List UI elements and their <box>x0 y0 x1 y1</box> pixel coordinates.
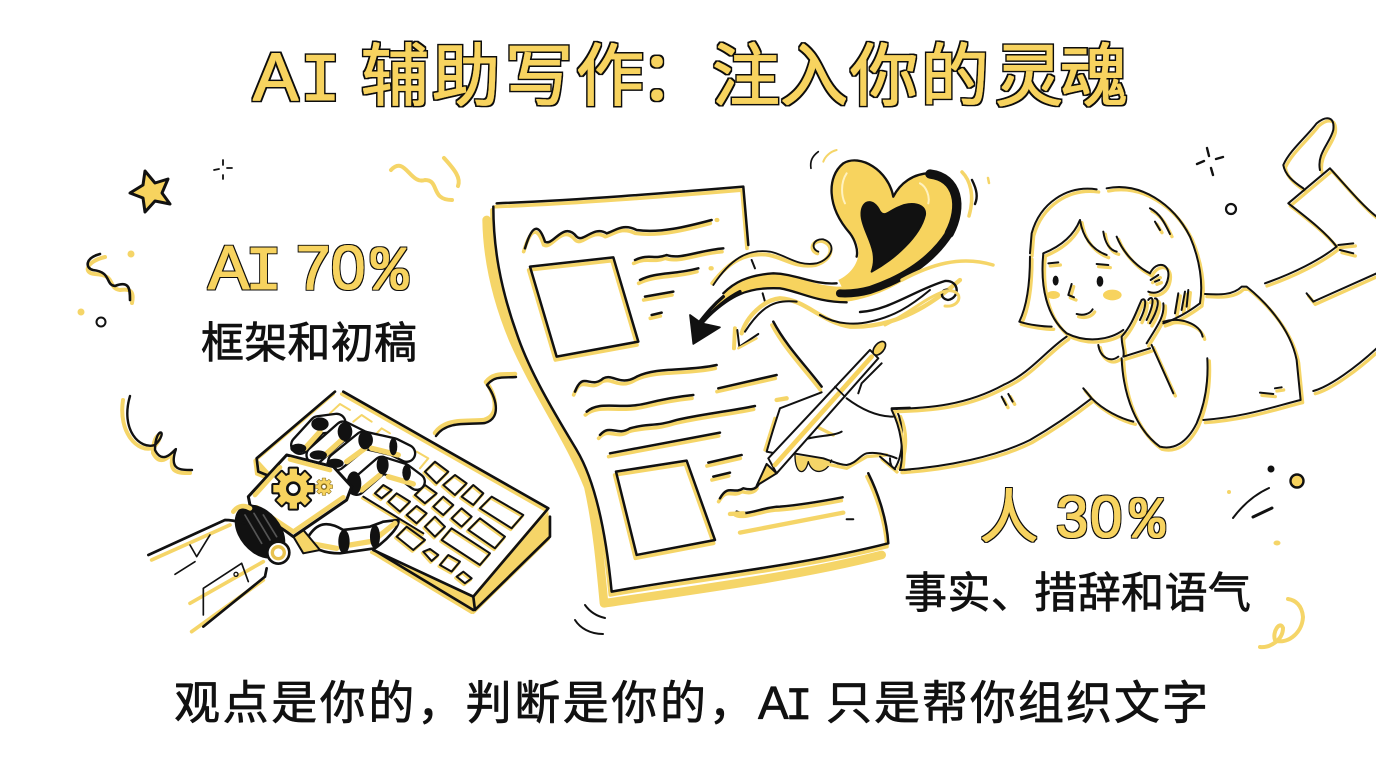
document page <box>487 187 888 603</box>
bottom tagline: 观点是你的，判断是你的， <box>174 677 757 729</box>
bottom tagline: I <box>785 681 840 733</box>
title: ： <box>640 39 708 115</box>
heart right accents <box>860 172 993 325</box>
stat caption: 框架和初稿 <box>201 320 417 368</box>
icon: writing hand with pen <box>757 339 910 486</box>
robot wrist joint <box>224 495 296 568</box>
robot thumb <box>308 520 398 554</box>
stat caption: 事实、措辞和语气 <box>904 570 1251 618</box>
robot arm sleeve <box>148 520 267 632</box>
icon: robot hand <box>148 417 417 632</box>
icon: solid arrowhead <box>690 315 720 344</box>
icon: heart <box>700 150 959 323</box>
icon: large gear <box>273 469 313 509</box>
title: 辅助写作 <box>361 39 644 115</box>
title: A <box>253 39 299 115</box>
bottom tagline: A <box>758 677 789 729</box>
heart and flowing ribbons <box>690 150 960 348</box>
icon: girl lying down <box>880 118 1376 473</box>
hand <box>765 392 910 472</box>
robot fingers <box>290 417 417 495</box>
stat value: 人 30%: 30 <box>1056 485 1122 550</box>
cheeks <box>1047 290 1122 300</box>
stat value: AI 70%: I <box>245 237 319 308</box>
right stat: 人 30% <box>904 485 1251 618</box>
left stat: AI 70% <box>201 234 417 368</box>
keyboard <box>255 392 551 612</box>
icon: small gear <box>316 478 332 495</box>
stat value: AI 70%: 70 <box>296 234 365 303</box>
lower outlined arrow <box>734 280 960 348</box>
title: 注入你的灵魂 <box>712 39 1128 115</box>
icon: keyboard with cable <box>255 374 551 612</box>
bottom tagline: 只是帮你组织文字 <box>826 677 1210 729</box>
decorations: left doodles <box>78 158 605 634</box>
keyboard cable <box>435 374 515 433</box>
stat value: 人 30%: 人 <box>980 485 1054 550</box>
stat value: 人 30%: % <box>1130 490 1165 555</box>
decorations: right doodles <box>1197 148 1304 647</box>
stat value: AI 70%: % <box>371 237 409 308</box>
stat value: AI 70%: A <box>208 234 250 303</box>
title: I <box>300 44 382 121</box>
robot palm <box>248 455 352 553</box>
pen <box>757 339 888 486</box>
icon: star <box>130 171 170 212</box>
upper spiral line <box>712 239 832 285</box>
eyes <box>1053 276 1103 287</box>
